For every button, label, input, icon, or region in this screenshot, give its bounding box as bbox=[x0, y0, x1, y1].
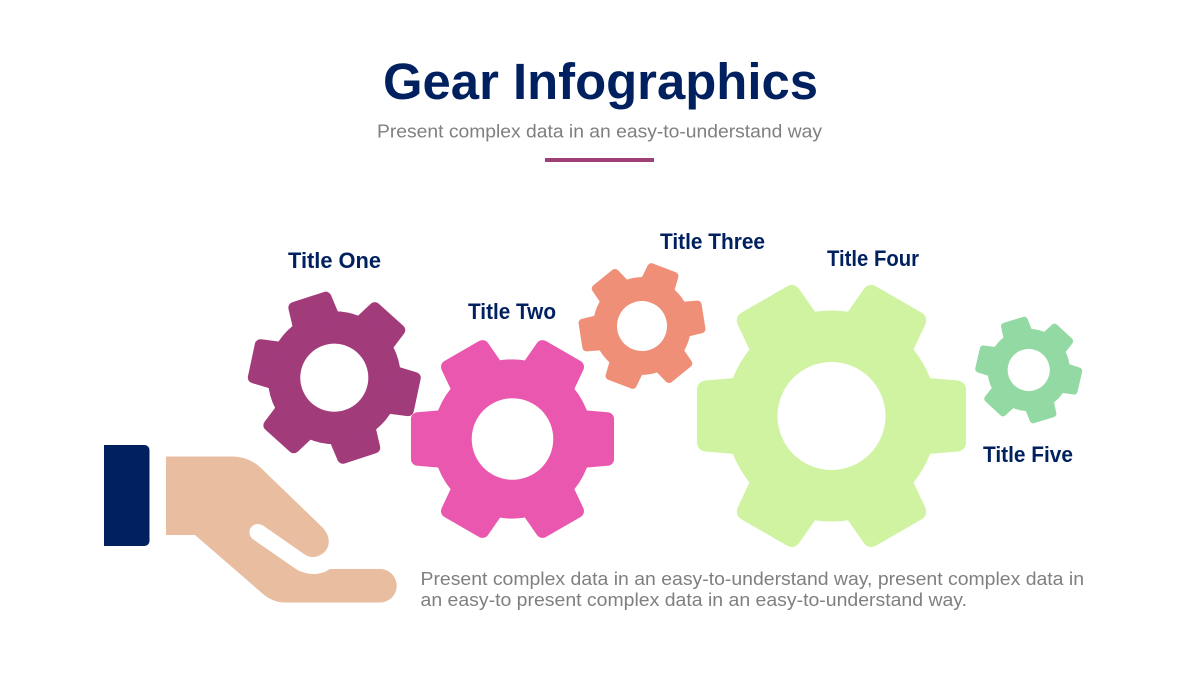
gear: title four bbox=[706, 293, 957, 539]
body text bbox=[420, 568, 1084, 610]
gear: title one bbox=[241, 285, 428, 470]
body text: an easy-to present complex data in an easy-to-understand way. bbox=[420, 589, 967, 610]
label: title four: Title Four bbox=[827, 246, 919, 271]
label: title three: Title Three bbox=[660, 229, 765, 254]
gear: title three bbox=[576, 260, 708, 392]
gear: title two bbox=[418, 346, 607, 532]
accent rule under subtitle bbox=[545, 158, 654, 162]
title: Gear Infographics bbox=[383, 53, 818, 110]
icon: navy cuff bbox=[104, 445, 150, 546]
icon: open hand bbox=[166, 456, 397, 602]
gear: title five bbox=[970, 312, 1087, 428]
icon: hand holding gears bbox=[104, 445, 397, 602]
label: title two: Title Two bbox=[468, 299, 556, 324]
label: title one: Title One bbox=[288, 248, 381, 273]
subtitle: Present complex data in an easy-to-understand way bbox=[377, 120, 823, 142]
body text: Present complex data in an easy-to-understand way, present complex data in bbox=[420, 568, 1084, 589]
label: title five: Title Five bbox=[983, 442, 1073, 467]
